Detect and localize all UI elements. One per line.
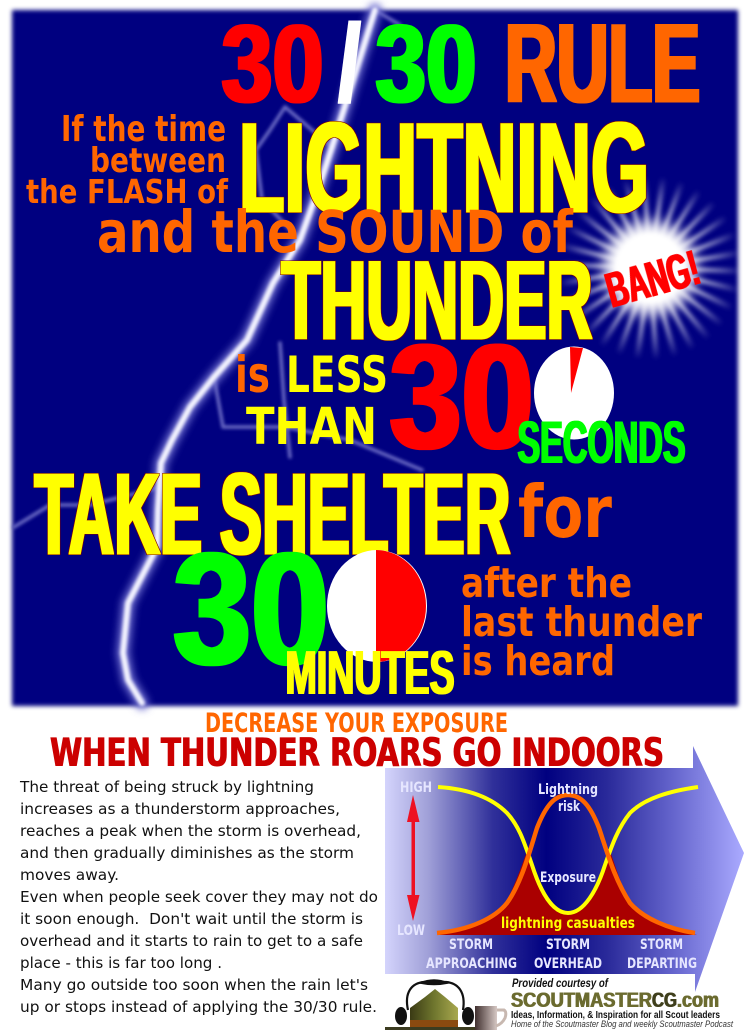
axis labels: LOW bbox=[397, 923, 425, 939]
text: is less than: LESS bbox=[286, 346, 388, 404]
axis labels bbox=[397, 780, 697, 972]
text block: lightning threat explanation bbox=[19, 778, 378, 1016]
icon: 30 second clock bbox=[534, 346, 614, 440]
label: lightning casualties: lightning casualties bbox=[501, 914, 635, 932]
text: is less than: THAN bbox=[246, 398, 377, 457]
text: provided courtesy of: Provided courtesy of bbox=[512, 976, 609, 990]
axis labels: STORM bbox=[449, 937, 493, 953]
title: 30/30 rule: 30 bbox=[376, 3, 476, 126]
axis labels: APPROACHING bbox=[426, 956, 517, 972]
number: 30 minutes: 30 bbox=[173, 519, 329, 698]
text: is less than: is bbox=[235, 346, 270, 404]
logo text: scoutmastercg.com: SCOUTMASTERCG.com bbox=[511, 989, 719, 1012]
text block: lightning threat explanation: it soon enough. Don't wait until the storm is bbox=[20, 910, 363, 928]
text block: lightning threat explanation: and then gradually diminishes as the storm bbox=[20, 844, 354, 862]
axis labels: Exposure bbox=[540, 870, 596, 886]
axis labels: Lightning bbox=[538, 782, 598, 798]
axis labels: risk bbox=[558, 799, 581, 815]
curve: exposure bbox=[438, 787, 698, 913]
text block: lightning threat explanation: Many go outside too soon when the rain let's bbox=[20, 976, 368, 994]
text block: lightning threat explanation: reaches a peak when the storm is overhead, bbox=[20, 822, 361, 840]
text block: lightning threat explanation: moves away. bbox=[20, 866, 119, 884]
text: after the last thunder is heard bbox=[461, 559, 703, 685]
lightning bolt bbox=[14, 10, 422, 703]
text: after the last thunder is heard: is heard bbox=[461, 637, 615, 685]
text: if the time between the flash of: the FLASH of bbox=[26, 172, 229, 211]
text: for: for bbox=[518, 470, 612, 554]
axis labels: STORM bbox=[546, 937, 590, 953]
text block: lightning threat explanation: increases as a thunderstorm approaches, bbox=[20, 800, 340, 818]
text: after the last thunder is heard: after the bbox=[461, 559, 632, 607]
icon: high-low arrow bbox=[407, 795, 420, 921]
text block: lightning threat explanation: up or stops instead of applying the 30/30 rule. bbox=[20, 998, 377, 1016]
text: if the time between the flash of bbox=[26, 109, 229, 211]
title: 30/30 rule: / bbox=[339, 2, 360, 125]
text block: lightning threat explanation: The threat of being struck by lightning bbox=[19, 778, 314, 796]
text: is less than bbox=[235, 346, 388, 457]
title: 30/30 rule: 30 bbox=[222, 3, 324, 126]
title: 30/30 rule bbox=[222, 1, 700, 126]
axis labels: HIGH bbox=[400, 780, 432, 796]
axis labels: OVERHEAD bbox=[534, 956, 602, 972]
axis labels: DEPARTING bbox=[627, 956, 697, 972]
number: 30 seconds: 30 bbox=[390, 313, 534, 480]
arrow: storm progression background bbox=[385, 746, 744, 992]
icon: scoutmaster logo hat and mug bbox=[385, 980, 506, 1030]
icon: 30 minute clock bbox=[327, 550, 427, 662]
text: if the time between the flash of: between bbox=[90, 141, 226, 181]
curve: lightning risk bbox=[437, 795, 695, 933]
chart: storm exposure and risk diagram bbox=[385, 746, 744, 992]
chart area: lightning casualties fill bbox=[437, 851, 697, 935]
text: after the last thunder is heard: last thunder bbox=[461, 598, 703, 646]
text: if the time between the flash of: If the time bbox=[61, 109, 226, 150]
text block: lightning threat explanation: Even when people seek cover they may not do bbox=[20, 888, 378, 906]
icon: starburst flash bbox=[592, 210, 708, 326]
text block: lightning threat explanation: place - this is far too long . bbox=[20, 954, 222, 972]
axis labels: STORM bbox=[640, 937, 683, 953]
panel: storm background bbox=[12, 10, 738, 706]
text: and the sound of: and the SOUND of bbox=[97, 198, 574, 266]
subheading: decrease your exposure: DECREASE YOUR EXPOSURE bbox=[205, 708, 508, 739]
text block: lightning threat explanation: overhead and it starts to rain to get to a safe bbox=[20, 932, 363, 950]
label: minutes: MINUTES bbox=[286, 639, 454, 708]
